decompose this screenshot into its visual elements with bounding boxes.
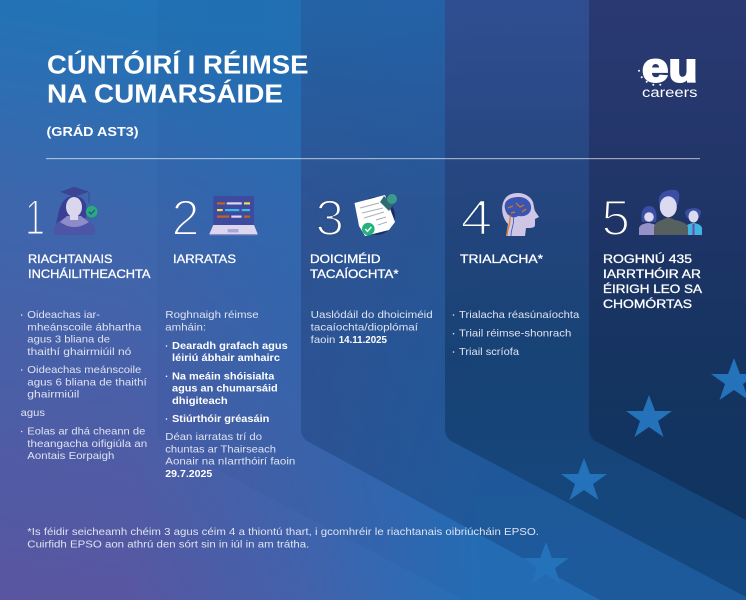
tests list: Triail réimse-shonrach <box>459 329 572 340</box>
step 5: selection <box>602 190 702 311</box>
heading: ROGHNÚ 435 <box>603 252 693 266</box>
application text: Roghnaigh réimse <box>165 310 259 321</box>
application text: agus an chumarsáid <box>172 384 278 394</box>
eligibility text: agus 3 bliana de <box>27 335 110 346</box>
application text: chuntas ar Thairseach <box>165 444 276 455</box>
application text: 29.7.2025 <box>165 469 213 480</box>
eligibility text <box>21 310 148 462</box>
heading: TRIALACHA* <box>460 252 543 266</box>
subtitle: grade: (GRÁD AST3) <box>46 124 138 139</box>
application text: Déan iarratas trí do <box>165 432 262 443</box>
heading <box>603 252 702 311</box>
eligibility text: agus <box>21 408 45 419</box>
heading: CHOMÓRTAS <box>603 297 692 311</box>
step 1: eligibility <box>21 187 151 462</box>
icon: laptop <box>209 196 258 235</box>
heading: IARRTHÓIR AR <box>603 267 701 281</box>
number 1: 1 <box>25 190 45 246</box>
heading: ÉIRIGH LEO SA <box>603 282 702 296</box>
tests list: Triail scríofa <box>459 347 519 358</box>
number 4: 4 <box>460 190 492 246</box>
eligibility text: mheánscoile ábhartha <box>27 322 142 333</box>
eligibility text: Oideachas meánscoile <box>27 365 142 376</box>
application text: Na meáin shóisialta <box>172 371 275 382</box>
divider <box>46 158 700 159</box>
documents text: 14.11.2025 <box>339 335 387 346</box>
documents text: tacaíochta/dioplómaí <box>311 322 418 333</box>
icon: document with stamp <box>354 194 397 236</box>
application text: Dearadh grafach agus <box>172 341 288 352</box>
icon: graduate <box>54 187 97 235</box>
heading: IARRATAS <box>173 252 236 266</box>
tests list <box>453 310 580 358</box>
heading <box>28 252 151 281</box>
eligibility text: Aontais Eorpaigh <box>27 451 115 462</box>
documents text <box>311 310 433 346</box>
footnote <box>27 527 539 550</box>
heading: TACAÍOCHTA* <box>310 267 399 281</box>
eligibility text: Oideachas iar- <box>27 310 100 321</box>
heading: DOICIMÉID <box>310 252 380 266</box>
title: NA CUMARSÁIDE <box>47 79 283 108</box>
logo: EU careers <box>638 44 698 100</box>
footnote: *Is féidir seicheamh chéim 3 agus céim 4 a thiontú thart, i gcomhréir le riachtanais oibriúcháin EPSO. <box>27 527 539 538</box>
application text: amháin: <box>165 322 206 333</box>
step 3: supporting documents <box>310 190 433 346</box>
footnote: Cuirfidh EPSO aon athrú den sórt sin in iúl in am trátha. <box>27 539 309 550</box>
number 5: 5 <box>602 190 630 246</box>
documents text: Uaslódáil do dhoiciméid <box>311 310 433 321</box>
application text: dhigiteach <box>172 396 228 407</box>
title <box>47 49 308 108</box>
heading: INCHÁILITHEACHTA <box>28 267 151 281</box>
application text <box>165 310 296 480</box>
title: CÚNTÓIRÍ I RÉIMSE <box>47 49 308 79</box>
number 2: 2 <box>172 190 200 246</box>
step 2: application <box>165 190 296 480</box>
documents text: faoin <box>311 335 336 346</box>
icon: head with brain <box>502 193 539 236</box>
logo: EU careers: eu <box>642 44 698 90</box>
icon: three people <box>639 190 702 235</box>
eligibility text: ghairmiúil <box>27 390 79 401</box>
heading <box>310 252 399 281</box>
application text: Stiúrthóir gréasáin <box>172 414 269 425</box>
eligibility text: Eolas ar dhá cheann de <box>27 427 146 438</box>
tests list: Trialacha réasúnaíochta <box>459 310 580 321</box>
logo: EU careers: careers <box>642 85 698 100</box>
application text: Aonair na nIarrthóirí faoin <box>165 457 296 468</box>
eligibility text: theangacha oifigiúla an <box>27 439 148 450</box>
heading: RIACHTANAIS <box>28 252 113 266</box>
eligibility text: thaithí ghairmiúil nó <box>27 347 132 358</box>
eligibility text: agus 6 bliana de thaithí <box>27 378 147 388</box>
star decorations <box>523 358 746 584</box>
application text: léiriú ábhair amhairc <box>172 353 280 364</box>
step 4: tests <box>453 190 580 358</box>
number 3: 3 <box>316 190 344 246</box>
